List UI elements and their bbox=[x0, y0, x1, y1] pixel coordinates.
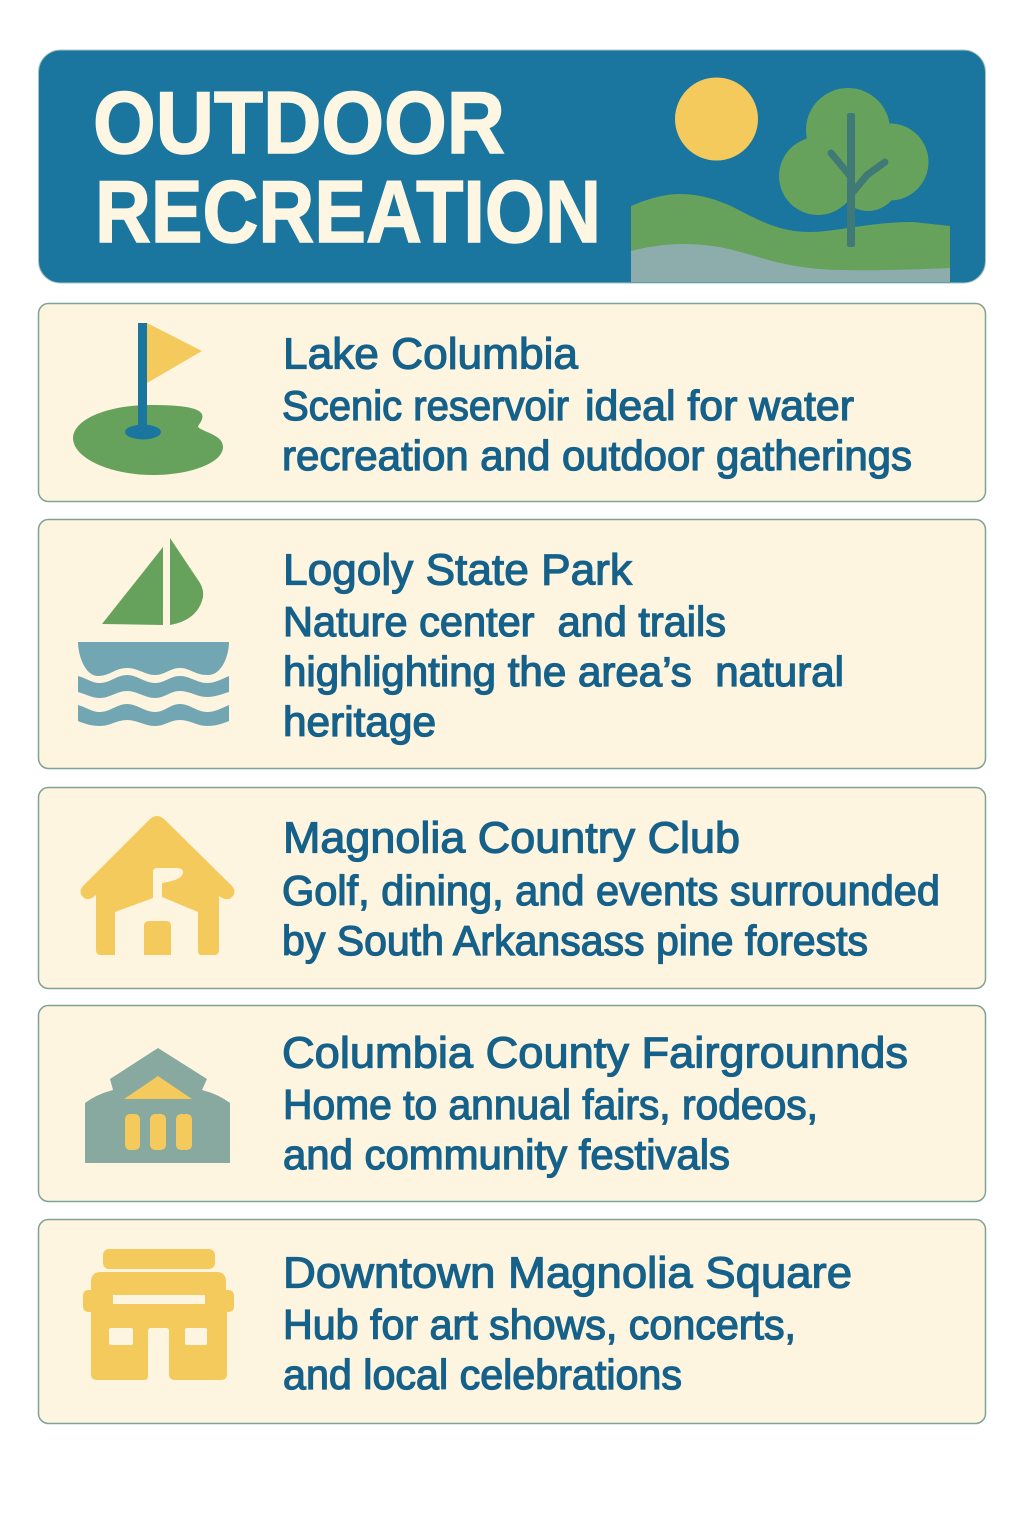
description: Golf, dining, and events surrounded bbox=[282, 867, 940, 914]
title: OUTDOOR bbox=[93, 73, 505, 172]
icon: landscape hills and water bbox=[631, 194, 950, 282]
title: RECREATION bbox=[95, 162, 601, 261]
title bbox=[93, 73, 601, 261]
panel: header banner bbox=[38, 50, 986, 283]
icon: tree bbox=[779, 88, 928, 247]
heading: Lake Columbia bbox=[283, 330, 579, 378]
description bbox=[282, 867, 940, 964]
description: Home to annual fairs, rodeos, bbox=[283, 1081, 818, 1128]
icon: fairground pavilion bbox=[85, 1048, 230, 1163]
description bbox=[283, 1301, 796, 1398]
heading: Logoly State Park bbox=[283, 546, 633, 594]
heading: Magnolia Country Club bbox=[283, 814, 740, 862]
description: ideal for water bbox=[585, 382, 854, 429]
description bbox=[283, 1081, 818, 1178]
description bbox=[283, 598, 844, 745]
icon: sailboat on waves bbox=[78, 538, 229, 726]
heading: Columbia County Fairgrounnds bbox=[282, 1028, 908, 1078]
icon: sun bbox=[675, 78, 758, 160]
panel: Columbia County Fairgrounds bbox=[38, 1006, 986, 1202]
panel: Magnolia Country Club bbox=[38, 788, 986, 988]
panel: Lake Columbia bbox=[38, 304, 986, 502]
icon: golf flag on green bbox=[73, 323, 223, 475]
description: Nature center and trails bbox=[283, 598, 726, 645]
icon: clubhouse with flag bbox=[80, 816, 234, 955]
description bbox=[282, 382, 912, 479]
description: and local celebrations bbox=[283, 1351, 682, 1398]
description: Scenic reservoir bbox=[282, 382, 569, 429]
heading: Downtown Magnolia Square bbox=[283, 1248, 852, 1298]
panel: Logoly State Park bbox=[38, 520, 986, 768]
description: and community festivals bbox=[283, 1131, 730, 1178]
description: recreation and outdoor gatherings bbox=[282, 432, 912, 479]
description: by South Arkansass pine forests bbox=[282, 917, 868, 964]
description: heritage bbox=[283, 698, 436, 745]
description: Hub for art shows, concerts, bbox=[283, 1301, 796, 1348]
icon: storefront bbox=[83, 1249, 234, 1380]
panel: Downtown Magnolia Square bbox=[38, 1220, 986, 1424]
description: highlighting the area’s natural bbox=[283, 648, 844, 695]
